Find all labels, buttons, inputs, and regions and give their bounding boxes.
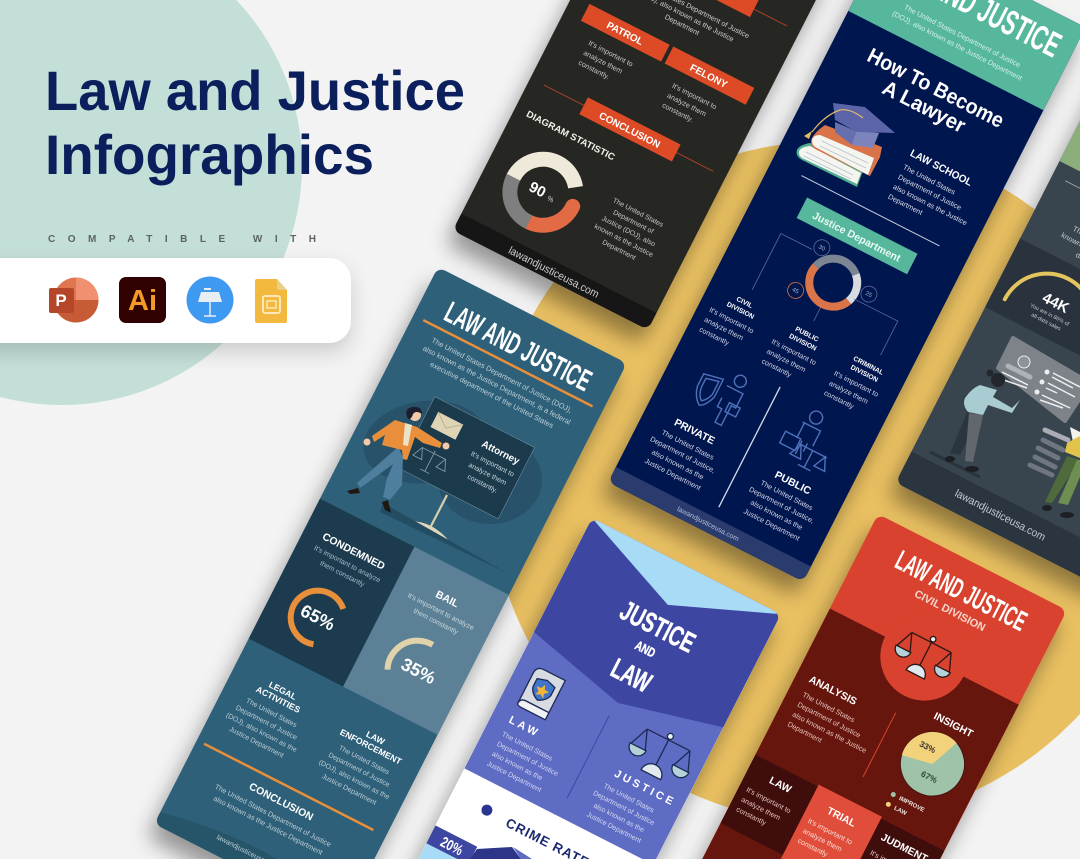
icon: Illustrator [119,277,166,323]
text: law description: Department of Justice [495,741,559,778]
text: law description: The United States [500,731,554,763]
text: criminal division: CRIMINAL [852,355,885,377]
text: attorney description: It's important to [469,451,515,479]
gauge caption: You are in 86% of [1029,303,1070,328]
text: public division [760,319,827,387]
chart: 65 percent ring: 65% [297,601,338,635]
panel: trial text [796,800,862,859]
light purple section [464,518,781,859]
title: Law and Justice [45,59,465,122]
heading: justice column: JUSTICE [612,768,678,809]
heading: private: PRIVATE [672,417,716,447]
text: criminal division: It's important to [833,369,880,399]
panel: navy how to become a lawyer card [608,0,1080,582]
text: intro: executive department of the United States [429,360,555,430]
panel: judment background [860,818,944,859]
text: public description: also known as the [749,498,804,532]
illustration: woman pointing at screen [930,370,1020,477]
light blue flap [594,520,778,614]
chart: gauge arc [1005,257,1080,342]
tag: felony: FELONY [688,63,729,91]
text: civil division: CIVIL [735,296,754,310]
mint background circle [0,0,302,405]
icon: Google Slides [255,279,287,323]
text: diagram description: The United States [611,197,665,229]
panel: dark infographic card [453,0,832,330]
chart: 90 percent donut [497,146,589,238]
bullet dot [480,803,494,818]
text: law description: Justice Department [485,761,542,794]
icon: small scales [409,443,451,479]
text: analysis description: Department [786,720,824,745]
text: law enforcement: (DOJ), also known as the [317,759,390,801]
yellow background circle [489,141,1080,823]
icon: public lawyer [775,402,848,477]
chart: crime rate tab and base [418,826,478,859]
text: public division: It's important to [770,337,818,367]
tag: felony: constantly. [661,101,695,124]
heading: justice and law: LAW [606,652,657,699]
text: legal activities: LEGAL [267,679,299,702]
gauge value: 44K [1039,289,1072,317]
tag: conclusion: CONCLUSION [597,111,662,151]
green header [1060,122,1080,172]
footer band: lawandjusticeusa.com [506,245,601,301]
heading: how to become a lawyer: A Lawyer [878,76,969,138]
panel: purple justice and law card [404,520,781,859]
illustration: man with document [1042,427,1080,518]
text: bail description: them constantly [412,608,459,637]
orange rule [204,744,373,830]
chart values: 25 [864,291,873,299]
tag: conclusion [539,77,717,180]
icon: scales [621,719,701,790]
title: Infographics [45,123,374,186]
heading: bail: BAIL [433,589,461,611]
text: law enforcement: Department of Justice [327,752,391,789]
panel: condemned background [249,499,414,687]
heading: how to become a lawyer: How To Become [864,44,1008,133]
dark red section [702,608,1019,859]
illustration: attorney woman [347,407,450,513]
tag: patrol: PATROL [604,20,645,48]
chart: 90 percent donut: % [546,195,555,204]
panel: bail background [343,547,509,735]
text: private description [639,424,722,495]
text: attorney description: constantly. [466,474,498,495]
text: civil division [698,287,765,355]
text: public division: constantly [760,356,793,379]
text: public description: The United States [759,478,815,512]
screen panel [998,338,1080,421]
text: justice description [582,780,661,847]
text: law description [485,731,564,798]
text: criminal division: DIVISION [849,364,879,384]
text: intro: The United States Department of Justice (DOJ), [430,336,574,415]
board [398,397,535,519]
chart: 90 percent donut: 90 [526,179,549,201]
chart: insight pie: 67% [919,769,939,785]
panel: teal law and justice card [154,267,627,859]
green header [848,0,1080,110]
text: public division: analyze them [765,347,807,374]
text: legal activities: The United States [245,698,298,729]
text: bail description: It's important to analyze [406,592,475,632]
heading: conclusion: CONCLUSION [247,782,315,823]
icon: scales [888,623,961,688]
text: law school [887,148,986,237]
divider line [801,176,940,246]
text: public division: DIVISION [788,333,818,353]
heading: justice and law: AND [633,638,658,660]
text: law school: also known as the Justice [892,182,969,227]
icon: books and graduation cap [797,103,895,187]
chart connectors [752,221,916,355]
text: condemned description: It's important to analyze [313,545,381,584]
legend: IMPROVE [898,796,925,814]
text: legal activities [220,668,320,764]
text: criminal division: constantly [823,388,856,411]
text: diagram description: Department of [612,209,654,236]
title [45,59,465,186]
panel: law text: It's important to [745,785,793,815]
footer band [608,467,811,582]
illustration: data bars [1030,430,1068,475]
chart values [791,243,882,326]
text: legal activities: Justice Department [228,726,285,760]
text: law school: Department [887,192,924,217]
decorative heading rule [1065,181,1080,265]
panel: law text: analyze them [740,795,782,822]
text: public description: Department of Justice, [748,485,816,525]
chart values: 30 [817,244,826,253]
chart: 65 percent ring [272,572,363,663]
panel: red civil division card [688,516,1066,859]
text: public description [738,475,821,545]
illustration backdrop blob [358,393,542,524]
teal card lower content [167,526,490,859]
board stand [408,495,450,542]
chart: 35 percent ring [364,617,471,724]
footer band [453,214,656,330]
text: justice description: Justice Department [585,811,642,845]
presentation board group [398,397,535,519]
panel: trial text: analyze them [801,826,844,853]
text: criminal division: analyze them [828,378,870,406]
tag: patrol: constantly. [577,58,611,81]
column divider [863,713,896,777]
text: public description: Justice Department [742,507,801,543]
header text and tag: Department [663,12,701,37]
panel: trial text: It's important to [806,816,854,846]
text: law enforcement: Justice Department [320,773,377,807]
text: civil division: analyze them [703,315,745,342]
gauge caption: all-data sales [1030,312,1062,332]
icon: PowerPoint [49,278,98,322]
text: law school: Department of Justice [897,172,963,212]
text: description [1055,221,1080,316]
text: diagram description: known as the Justice [593,223,654,259]
tag: justice department [797,197,918,274]
tag: patrol: analyze them [582,48,624,76]
text: law enforcement: LAW [364,729,387,747]
red semicircle [880,636,964,701]
dark purple chevron [534,520,778,728]
heading: insight: INSIGHT [932,711,975,740]
icon: Illustrator: Ai [128,285,157,317]
chart: crime rate 3D bar [470,847,532,859]
panel: law background [720,755,818,855]
column divider [567,715,609,798]
tag: justice department: Justice Department [810,211,902,265]
subheading: civil division: CIVIL DIVISION [912,588,987,634]
icon: envelope [431,412,463,440]
text: conclusion description: The United States Department of Justice [213,782,333,849]
tag: felony: It's important to [671,81,718,111]
text: analysis description: Department of Justice [796,700,862,740]
text: diagram description [588,195,668,268]
text: analysis description [786,690,878,765]
chart: division donut [788,237,879,328]
text: law school: The United States [902,162,957,197]
text: law enforcement [312,716,413,811]
text: public division: PUBLIC [794,326,820,344]
tag: patrol [562,4,670,99]
text: diagram description: Department [601,239,637,262]
heading: justice and law: JUSTICE [615,595,701,659]
text: law enforcement: ENFORCEMENT [338,727,404,767]
panel: trial text: constantly [796,836,830,859]
panel: trial text: TRIAL [825,806,858,830]
gauge panel [985,238,1080,356]
text: intro: also known as the Justice Department, is a federal [421,344,573,427]
panel: software icons [0,258,351,343]
text: analysis description: also known as the Justice [791,710,868,755]
chart: insight pie: 33% [918,739,938,755]
text: analysis description: The United States [801,690,857,724]
heading: condemned: CONDEMNED [320,532,387,573]
tag: felony: analyze them [666,91,708,118]
footer url: lawandjusticeusa.com [676,506,740,543]
text: header description: (DOJ), also known as the Justice Department [891,9,1024,83]
heading: law column: LAW [507,714,542,740]
footer band [157,812,277,859]
text: header description: The United States Department of Justice [903,2,1022,69]
heading: analysis: ANALYSIS [807,674,858,708]
text: diagram description: Justice (DOJ), also [600,215,656,248]
text: private description: also known as the [650,447,705,481]
text: private description: Department of Justice, [649,434,717,475]
icon: law book with shield [517,666,565,720]
heading: law and justice: LAW AND JUSTICE [439,296,597,398]
text: justice description: Department of Justice [592,790,656,827]
text: attorney description [459,451,515,498]
heading: attorney: Attorney [480,439,521,467]
text: law school: LAW SCHOOL [908,148,974,189]
chart: insight pie [889,721,976,807]
floor shadow [380,503,507,573]
panel: law text: LAW [767,775,793,796]
heading: public: PUBLIC [773,470,813,498]
panel: law text: constantly [735,805,768,827]
footer band [898,452,1080,576]
compatible with label: COMPATIBLE WITH [48,234,316,245]
icon: Keynote [186,276,234,324]
panel: trial background [780,784,882,859]
text: condemned description: them constantly [319,560,366,589]
footer url: lawandjusticeusa.com [953,488,1047,544]
panel: slate infographic card [896,34,1080,592]
heading: diagram statistic: DIAGRAM STATISTIC [524,109,617,163]
chart values: 45 [791,287,800,296]
text: private description: The United States [660,428,716,462]
orange rule [423,320,593,406]
text: legal activities: Department of Justice [234,705,298,742]
legend [884,791,925,824]
header text and tag [622,0,792,71]
text: legal activities: (DOJ), also known as the [225,712,298,754]
icon: private lawyer [686,360,754,429]
chart: 35 percent ring: 35% [398,654,439,688]
text: criminal division [823,351,889,418]
text: civil division: constantly [698,325,731,347]
text: conclusion description: also known as the Justice Department [212,794,324,857]
tag: felony [646,47,754,142]
text: law description: also known as the [490,751,544,782]
legend: LAW [893,806,908,817]
icon: PowerPoint: P [55,291,67,310]
heading: justice and law [590,595,701,708]
text: legal activities: ACTIVITIES [254,684,302,715]
panel: law text [735,768,801,835]
text: civil division: It's important to [708,305,755,335]
text: attorney description: analyze them [467,462,507,487]
vertical divider [719,387,780,507]
text: justice description: also known as the [592,802,645,834]
tag: patrol: It's important to [587,38,635,69]
text: justice description: The United States [602,783,655,815]
text: law enforcement: The United States [337,745,391,777]
text: civil division: DIVISION [725,301,755,321]
text: private description: Justice Department [643,456,702,492]
